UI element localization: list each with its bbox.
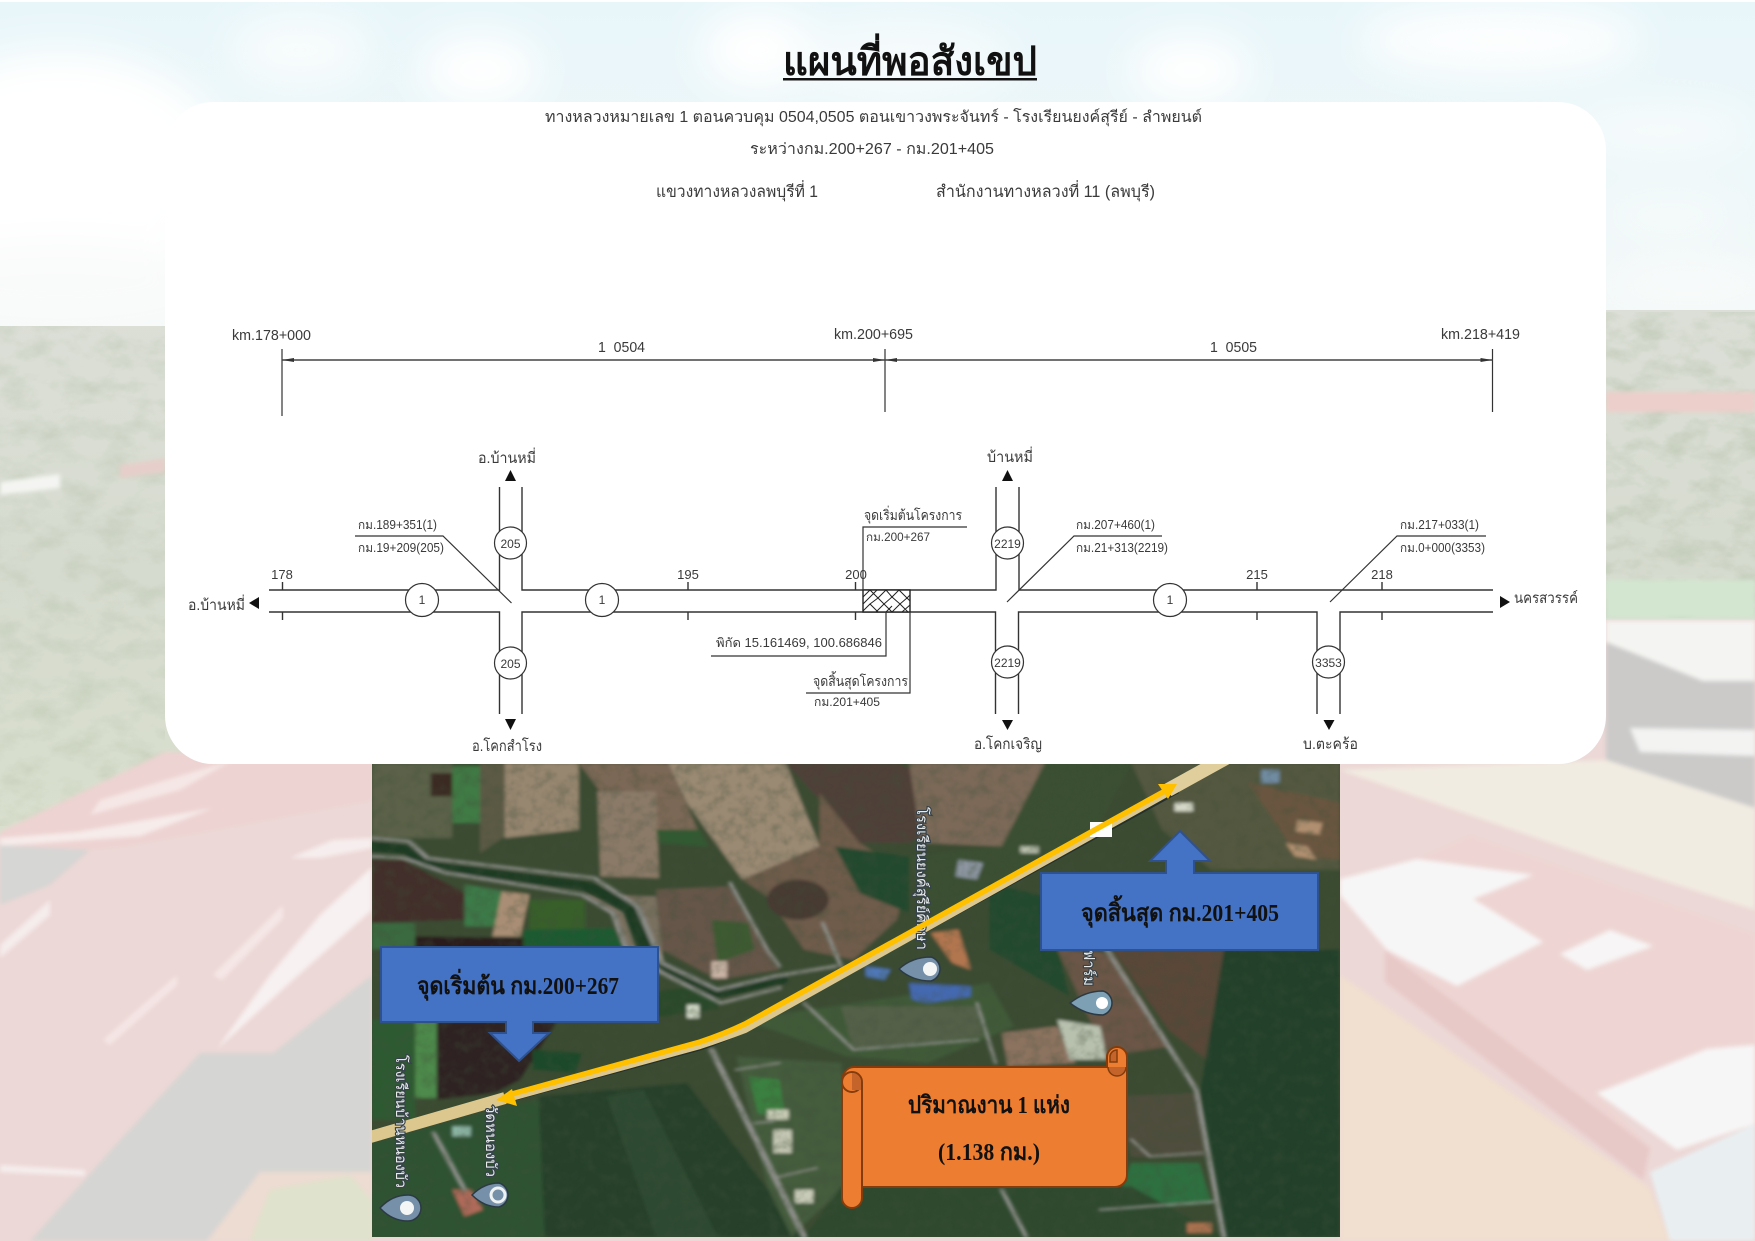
project start leader: จุดเริ่มต้นโครงการ bbox=[864, 506, 962, 524]
map pins bbox=[380, 957, 1112, 1221]
subtitle lines bbox=[545, 108, 1202, 202]
callout: work quantity scroll: ปริมาณงาน 1 แห่ง bbox=[908, 1093, 1070, 1119]
direction labels: บ้านหมี่ bbox=[987, 446, 1033, 466]
coordinates leader bbox=[711, 612, 886, 656]
junction leaders: กม.21+313(2219) bbox=[1076, 541, 1168, 555]
control section dimension line bbox=[232, 327, 1520, 416]
route numbers and kilometre marks: 205 bbox=[500, 657, 521, 671]
direction labels: นครสวรรค์ bbox=[1514, 590, 1578, 607]
junction leaders: กม.0+000(3353) bbox=[1400, 541, 1485, 555]
direction labels: อ.โคกสำโรง bbox=[472, 737, 542, 755]
project start leader bbox=[863, 506, 967, 590]
route numbers and kilometre marks bbox=[271, 537, 1393, 671]
route numbers and kilometre marks: 1 bbox=[419, 593, 426, 607]
route numbers and kilometre marks: 1 bbox=[599, 593, 606, 607]
coordinates leader: พิกัด 15.161469, 100.686846 bbox=[716, 636, 882, 650]
subtitle lines: ทางหลวงหมายเลข 1 ตอนควบคุม 0504,0505 ตอนเขาวงพระจันทร์ - โรงเรียนยงค์สุรีย์ - ลำพยนต์ bbox=[545, 108, 1202, 127]
callout: end point bbox=[1041, 831, 1318, 950]
control section dimension line: km.178+000 bbox=[232, 328, 311, 344]
title: แผนที่พอสังเขป bbox=[783, 33, 1037, 84]
map place labels: โรงเรียนยงค์สุรีย์ศึกษา bbox=[912, 807, 931, 950]
direction labels: อ.บ้านหมี่ bbox=[478, 447, 536, 467]
route numbers and kilometre marks: 195 bbox=[677, 567, 699, 582]
route numbers and kilometre marks: 2219 bbox=[994, 537, 1021, 551]
route numbers and kilometre marks: 215 bbox=[1246, 567, 1268, 582]
junction leaders bbox=[355, 518, 1486, 603]
route numbers and kilometre marks: 2219 bbox=[994, 656, 1021, 670]
project start leader: กม.200+267 bbox=[866, 532, 930, 544]
route numbers and kilometre marks: 200 bbox=[845, 567, 867, 582]
route numbers and kilometre marks: 3353 bbox=[1315, 656, 1342, 670]
direction labels: อ.โคกเจริญ bbox=[974, 735, 1042, 753]
map place labels bbox=[392, 807, 1097, 1188]
road network lines bbox=[269, 487, 1493, 714]
project end leader: จุดสิ้นสุดโครงการ bbox=[813, 671, 908, 690]
junction leaders: กม.217+033(1) bbox=[1400, 518, 1479, 532]
direction labels: อ.บ้านหมี่ bbox=[188, 594, 245, 614]
project line arrow bbox=[496, 784, 1177, 1106]
control section dimension line: 1 0505 bbox=[1210, 340, 1257, 356]
route number circles bbox=[406, 527, 1344, 679]
subtitle lines: แขวงทางหลวงลพบุรีที่ 1 bbox=[656, 180, 818, 202]
map place labels: ฟาร์ม bbox=[1080, 950, 1097, 986]
control section dimension line: 1 0504 bbox=[598, 340, 645, 356]
route numbers and kilometre marks: 205 bbox=[500, 537, 521, 551]
callout: work quantity scroll bbox=[842, 1047, 1127, 1208]
map: main road beneath project line bbox=[372, 764, 1230, 1143]
junction leaders: กม.19+209(205) bbox=[358, 541, 444, 555]
junction leaders: กม.207+460(1) bbox=[1076, 518, 1155, 532]
map place labels: วัดหนองบัว bbox=[482, 1105, 499, 1177]
route numbers and kilometre marks: 1 bbox=[1167, 593, 1174, 607]
callout: start point: จุดเริ่มต้น กม.200+267 bbox=[417, 968, 619, 1002]
control section dimension line: km.218+419 bbox=[1441, 327, 1520, 343]
callout: start point bbox=[381, 947, 658, 1061]
callout: work quantity scroll: (1.138 กม.) bbox=[938, 1140, 1040, 1166]
direction labels bbox=[188, 446, 1578, 755]
callout: end point: จุดสิ้นสุด กม.201+405 bbox=[1081, 894, 1279, 929]
panel: road schematic bbox=[165, 102, 1606, 764]
subtitle lines: ระหว่างกม.200+267 - กม.201+405 bbox=[750, 141, 994, 158]
satellite map bbox=[372, 764, 1340, 1237]
subtitle lines: สำนักงานทางหลวงที่ 11 (ลพบุรี) bbox=[936, 180, 1155, 202]
direction labels: บ.ตะคร้อ bbox=[1303, 736, 1358, 753]
junction leaders: กม.189+351(1) bbox=[358, 518, 437, 532]
map place labels: โรงเรียนบ้านหนองบัว bbox=[392, 1055, 410, 1188]
route numbers and kilometre marks: 178 bbox=[271, 567, 293, 582]
project end leader bbox=[806, 612, 910, 709]
route numbers and kilometre marks: 218 bbox=[1371, 567, 1393, 582]
direction arrows bbox=[249, 470, 1510, 730]
control section dimension line: km.200+695 bbox=[834, 327, 913, 343]
project section hatch bbox=[863, 590, 910, 612]
project end leader: กม.201+405 bbox=[814, 695, 880, 709]
